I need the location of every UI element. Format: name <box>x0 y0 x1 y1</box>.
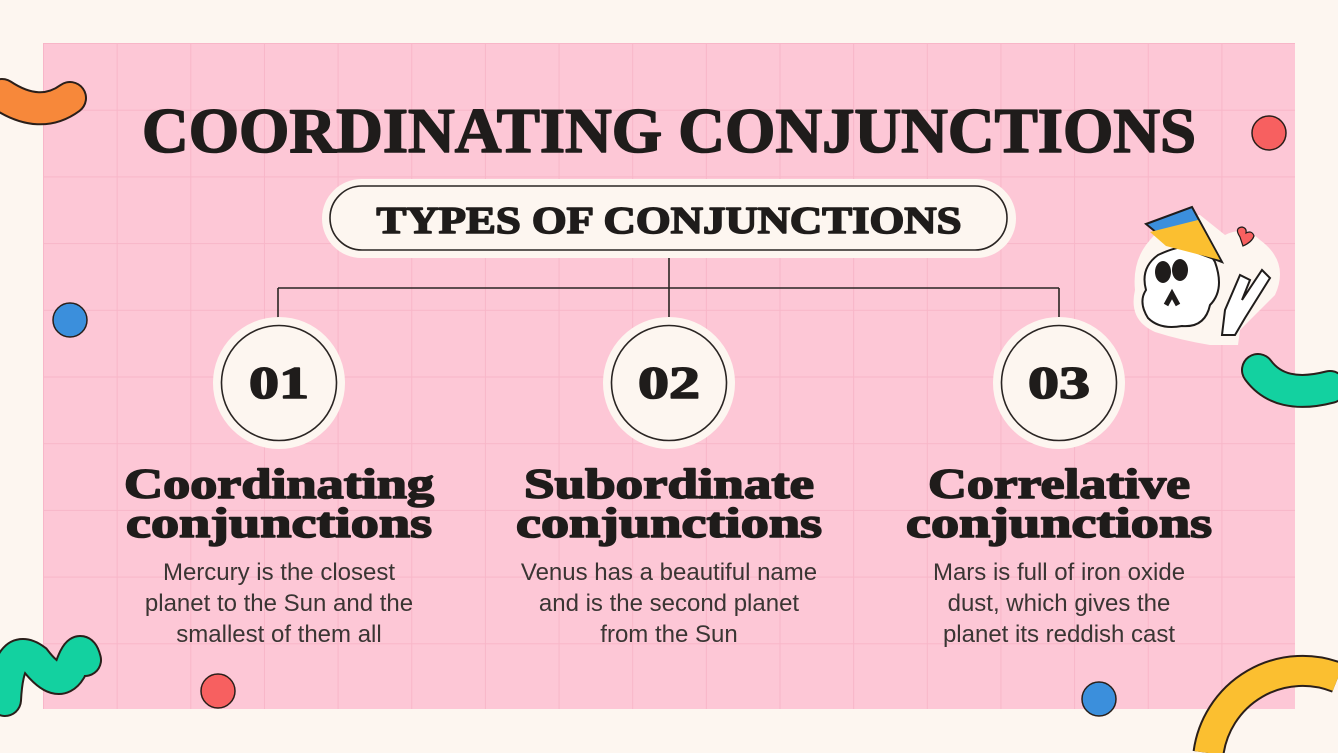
body 3 <box>933 559 1185 648</box>
dot: red top right <box>1252 116 1286 150</box>
heading 3 <box>906 462 1212 547</box>
heading 3: conjunctions <box>906 501 1212 547</box>
item 2 <box>516 317 822 648</box>
body 1 <box>145 559 413 648</box>
dot: blue left <box>53 303 87 337</box>
body 3: dust, which gives the <box>948 590 1170 617</box>
item 1 <box>124 317 434 648</box>
connector lines <box>278 250 1059 325</box>
body 3: Mars is full of iron oxide <box>933 559 1185 586</box>
body 1: Mercury is the closest <box>163 559 395 586</box>
number circle 03: 03 <box>1028 357 1090 408</box>
heading 2 <box>516 462 822 547</box>
heading 1: Coordinating <box>124 462 434 508</box>
heading 2: Subordinate <box>524 462 814 508</box>
number circle 01 <box>213 317 345 449</box>
heading 1 <box>124 462 434 547</box>
body 2: from the Sun <box>600 621 738 648</box>
item 3 <box>906 317 1212 648</box>
body 1: smallest of them all <box>176 621 382 648</box>
dot: red bottom <box>201 674 235 708</box>
number circle 02: 02 <box>638 357 700 408</box>
heading 1: conjunctions <box>126 501 432 547</box>
pill: types of conjunctions: TYPES OF CONJUNCTIONS <box>376 200 962 242</box>
decoration: yellow ring <box>1208 671 1338 753</box>
heading 3: Correlative <box>928 462 1190 508</box>
body 1: planet to the Sun and the <box>145 590 413 617</box>
body 2: and is the second planet <box>539 590 799 617</box>
decoration: green squiggle bottom-left <box>5 652 85 700</box>
body 2 <box>521 559 817 648</box>
body 2: Venus has a beautiful name <box>521 559 817 586</box>
title: COORDINATING CONJUNCTIONS <box>142 95 1196 166</box>
dot: blue bottom <box>1082 682 1116 716</box>
number circle 01: 01 <box>249 357 309 408</box>
heading 2: conjunctions <box>516 501 822 547</box>
number circle 02 <box>603 317 735 449</box>
number circle 03 <box>993 317 1125 449</box>
decoration: orange squiggle <box>2 95 70 108</box>
decoration: green arc right <box>1258 370 1330 391</box>
icon: skull sticker <box>1134 207 1280 345</box>
body 3: planet its reddish cast <box>943 621 1175 648</box>
pill: types of conjunctions <box>322 179 1016 258</box>
